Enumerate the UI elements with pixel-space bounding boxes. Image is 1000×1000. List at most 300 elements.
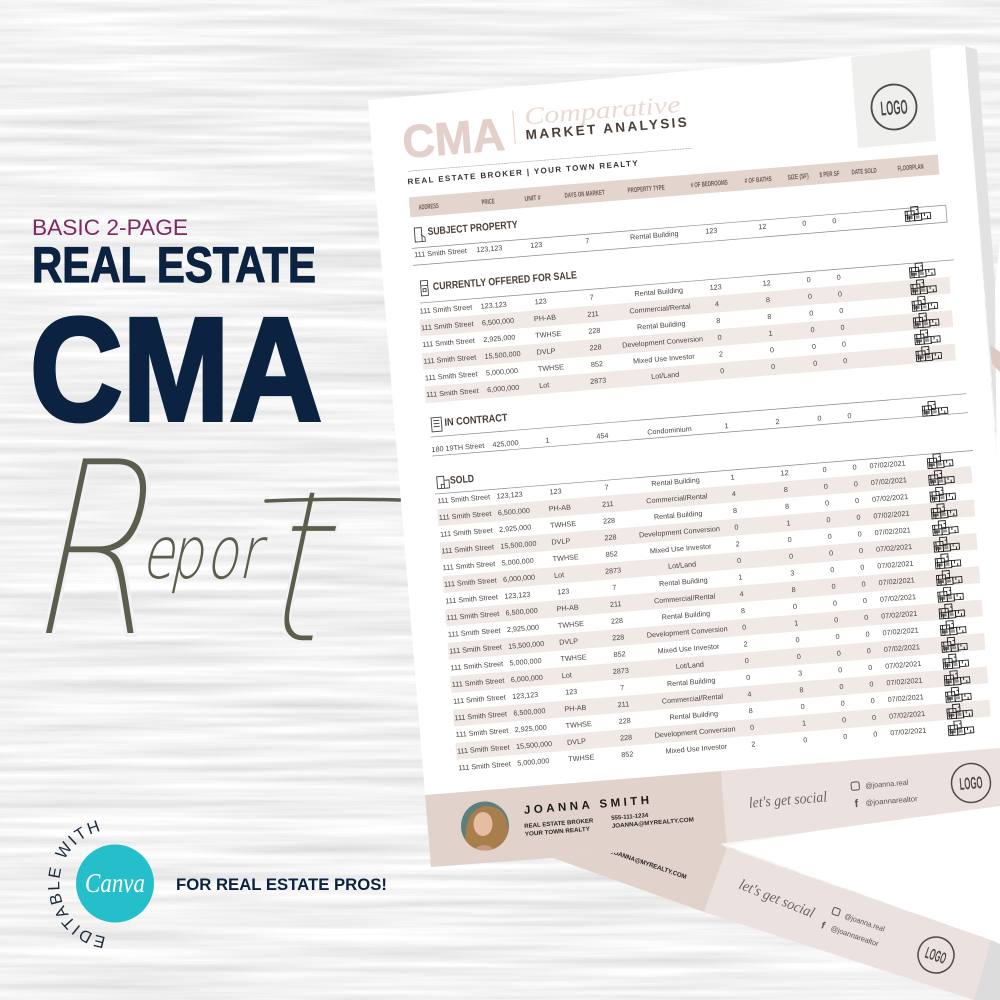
sold rows: 0 — [872, 713, 876, 722]
sold rows: 111 Smith Street — [453, 692, 506, 706]
subject row: 111 Smith Street — [414, 246, 467, 259]
sold rows: 123 — [549, 486, 562, 496]
sold rows: 111 Smith Street — [440, 526, 493, 539]
sold rows: 852 — [621, 749, 634, 759]
left heading block — [10, 215, 400, 694]
subject row: 0 — [832, 216, 837, 225]
heading: CMA: CMA — [30, 288, 322, 452]
sold rows: 0 — [861, 579, 866, 589]
offered rows: 0 — [717, 333, 722, 342]
offered row strips — [419, 277, 956, 403]
sold rows: Development Conversion — [639, 524, 720, 540]
sold rows: TWHSE — [565, 719, 592, 730]
sold rows: 211 — [602, 499, 614, 509]
page shadow strips — [965, 46, 1000, 480]
offered rows: 12 — [762, 278, 771, 288]
sold rows: DVLP — [567, 736, 586, 747]
social handles: @joanna.real — [865, 778, 909, 790]
sold rows: 0 — [827, 532, 832, 541]
sold rows: 0 — [835, 632, 840, 641]
sold rows: Rental Building — [667, 676, 716, 688]
title: market analysis: MARKET ANALYSIS — [525, 115, 687, 143]
sold rows: 07/02/2021 — [869, 459, 906, 470]
sold rows: 0 — [789, 552, 793, 561]
agent name: JOANNA SMITH — [524, 795, 650, 817]
sold rows: 0 — [750, 723, 754, 732]
subject row: Rental Building — [630, 229, 679, 242]
sold rows: DVLP — [551, 536, 571, 547]
sold rows: 0 — [863, 596, 867, 605]
sold rows: 0 — [839, 682, 844, 691]
offered rows: 7 — [589, 293, 594, 302]
offered rows: 0 — [840, 323, 845, 332]
sold rows: DVLP — [559, 636, 579, 647]
page 2 handles: f — [820, 920, 827, 932]
sold rows: 0 — [873, 730, 878, 739]
sold rows: Commercial/Rental — [646, 491, 708, 505]
offered rows: 0 — [720, 366, 725, 375]
sold rows: 1 — [794, 618, 799, 628]
sold rows: 07/02/2021 — [877, 559, 914, 571]
offered rows: Commercial/Rental — [629, 302, 691, 315]
offered rows: 111 Smith Street — [421, 319, 474, 332]
table header band: SIZE (SF) — [787, 173, 809, 182]
sold rows: 0 — [830, 565, 835, 574]
page 2 handles: @joannarealtor — [830, 924, 880, 949]
page 2 white sheet — [727, 240, 1000, 960]
table header band — [409, 154, 939, 217]
page 2 social script: let's get social — [737, 877, 817, 922]
sold rows: 228 — [612, 632, 625, 642]
footer text in sheared coordinates — [523, 773, 919, 838]
sold rows: Rental Building — [661, 609, 710, 622]
sold rows: 111 Smith Street — [438, 509, 492, 522]
section: currently offered for sale — [416, 238, 962, 403]
sold rows: 228 — [620, 733, 632, 743]
offered rows: 211 — [587, 309, 599, 319]
sold rows: 07/02/2021 — [885, 659, 921, 671]
sold rows: 6,000,000 — [503, 572, 535, 584]
offered rows: 6,500,000 — [482, 316, 514, 327]
offered rows: 8 — [716, 316, 721, 325]
dotted rule — [408, 148, 692, 171]
sold rows: 0 — [842, 715, 846, 725]
offered rows: 123,123 — [480, 300, 507, 311]
table header band: # OF BEDROOMS — [690, 180, 728, 190]
sold rows: 1 — [802, 718, 806, 728]
agent role — [524, 818, 595, 838]
offered rows: 2,925,000 — [483, 333, 516, 344]
offered rows: 1 — [768, 329, 773, 338]
sold rows: 0 — [866, 646, 871, 655]
table header band: ADDRESS — [418, 203, 439, 212]
page 2 logo — [913, 932, 959, 978]
sold rows: 07/02/2021 — [883, 642, 920, 654]
sold rows: TWHSE — [560, 652, 587, 663]
contract row: 1 — [545, 436, 550, 445]
sold rows: 111 Smith Street — [451, 676, 505, 689]
sold rows: 07/02/2021 — [881, 609, 918, 621]
sold rows: 07/02/2021 — [872, 492, 908, 504]
sold rows: Rental Building — [659, 575, 708, 588]
sold rows: 2 — [743, 639, 748, 649]
contract row — [431, 400, 948, 456]
social handles: @joannarealtor — [865, 794, 918, 807]
sold rows: 0 — [823, 482, 828, 491]
offered rows: 2 — [719, 349, 723, 359]
script word: Report: R — [10, 409, 193, 694]
heading: in contract: IN CONTRACT — [444, 412, 508, 429]
sold rows: 0 — [826, 515, 831, 524]
sold rows: 8 — [799, 685, 804, 694]
sold rows: 0 — [857, 529, 862, 539]
sold rows: Rental Building — [669, 709, 718, 722]
page 1 content in sheared local coordinates — [400, 71, 995, 776]
page 2 logo: LOGO — [923, 945, 948, 968]
sold rows: 123,123 — [504, 590, 531, 601]
script word: Report: p — [165, 511, 217, 596]
agent role: REAL ESTATE BROKER — [524, 818, 594, 830]
sold rows: 0 — [746, 673, 750, 682]
sold rows: 15,500,000 — [500, 539, 537, 551]
offered rows: 111 Smith Street — [423, 353, 476, 366]
sold rows: 111 Smith Street — [445, 592, 498, 606]
table header band: # OF BATHS — [744, 176, 772, 185]
sold rows: 123 — [565, 687, 577, 697]
sold rows: 2 — [735, 539, 740, 548]
logo badge: LOGO — [880, 96, 908, 121]
page 2 light footer — [704, 848, 991, 1000]
table header band: FLOORPLAN — [897, 164, 924, 173]
table header band: DATE SOLD — [851, 168, 877, 177]
sold rows: 228 — [618, 716, 631, 726]
sold rows: 111 Smith Street — [444, 576, 497, 589]
offered rows: Lot — [539, 380, 550, 390]
sold rows: Lot — [561, 670, 572, 680]
sold rows: 0 — [840, 699, 845, 708]
script word: Report: o — [201, 511, 251, 596]
offered rows: 0 — [842, 339, 846, 349]
portrait photo — [461, 802, 509, 850]
sold rows: 852 — [613, 649, 626, 659]
offered rows: 0 — [843, 356, 848, 365]
title: CMA: CMA — [400, 108, 506, 168]
sold rows: 07/02/2021 — [876, 542, 912, 554]
sold rows: 15,500,000 — [516, 739, 552, 751]
sold rows: 123,123 — [496, 490, 523, 501]
sold rows: 2873 — [605, 566, 621, 576]
sold rows: Development Conversion — [654, 724, 736, 740]
script word: Report: e — [137, 511, 188, 596]
offered rows: Rental Building — [634, 285, 683, 298]
sold rows: PH-AB — [564, 703, 587, 714]
sold rows: 228 — [604, 532, 617, 542]
sold rows: 0 — [864, 613, 869, 622]
sold rows: 3 — [790, 568, 795, 578]
offered rows — [419, 262, 942, 401]
sold rows: 1 — [786, 518, 791, 528]
sold rows: Commercial/Rental — [654, 591, 716, 605]
offered rows: 0 — [838, 289, 842, 299]
sold rows: 7 — [612, 583, 617, 592]
sold rows: 7 — [604, 483, 609, 492]
sold rows: 111 Smith Street — [449, 642, 502, 656]
sold rows: 0 — [742, 623, 747, 632]
sold rows: 852 — [605, 549, 618, 559]
subject row: 7 — [585, 236, 590, 245]
contract row: 0 — [817, 414, 822, 423]
offered rows: 0 — [836, 273, 841, 282]
agent contact: 555-111-1234 — [611, 813, 649, 822]
icon: contract — [431, 417, 442, 432]
page 2 contact: JOANNA@MYREALTY.COM — [609, 848, 687, 881]
sold rows: 07/02/2021 — [878, 575, 915, 587]
sold rows: 2873 — [612, 666, 629, 676]
offered rows: 5,000,000 — [486, 366, 518, 378]
sold rows: 111 Smith Street — [437, 492, 490, 505]
sold rows: 07/02/2021 — [880, 592, 916, 604]
sold rows: 8 — [785, 502, 789, 511]
sold rows: Rental Building — [651, 475, 700, 488]
sold rows: 0 — [859, 546, 863, 555]
sold rows: 0 — [853, 479, 858, 489]
offered rows: PH-AB — [534, 312, 557, 323]
sold rows: Mixed Use Investor — [657, 642, 720, 656]
sold rows: 0 — [856, 513, 861, 522]
page 2 behind — [553, 46, 1000, 1000]
offered rows: 228 — [589, 342, 602, 352]
sold rows: 0 — [787, 535, 792, 544]
sold rows: 4 — [739, 589, 744, 598]
sold rows: 8 — [748, 706, 753, 715]
heading: subject property: SUBJECT PROPERTY — [427, 219, 518, 238]
offered rows: 111 Smith Street — [425, 369, 478, 382]
sold rows: 5,000,000 — [509, 656, 542, 668]
social handles: f — [854, 798, 859, 810]
sold rows: 6,000,000 — [510, 673, 543, 684]
sold rows: 5,000,000 — [501, 556, 534, 567]
sold rows: 07/02/2021 — [870, 475, 907, 487]
page 1 footer — [425, 748, 1000, 867]
sold rows: 0 — [860, 563, 865, 572]
page 2 handles: @joanna.real — [843, 911, 886, 934]
sold rows: 0 — [744, 656, 749, 665]
offered rows: 0 — [771, 362, 776, 371]
sold rows: 07/02/2021 — [890, 726, 927, 737]
sold rows: 0 — [825, 498, 829, 508]
sold rows: 0 — [868, 663, 872, 672]
table header band: DAYS ON MARKET — [564, 190, 605, 200]
sold rows: 0 — [796, 652, 801, 661]
sold rows: 07/02/2021 — [882, 625, 919, 637]
offered rows: 15,500,000 — [484, 349, 521, 361]
sold rows: Development Conversion — [646, 624, 728, 640]
offered rows: 111 Smith Street — [419, 302, 473, 316]
agent role: YOUR TOWN REALTY — [525, 827, 590, 838]
sold rows: 123,123 — [512, 690, 539, 701]
sold rows: 0 — [795, 635, 800, 644]
sold rows: 0 — [838, 665, 842, 675]
sold rows: 111 Smith Street — [457, 742, 510, 756]
contract row: 1 — [724, 421, 729, 430]
offered rows: 0 — [809, 308, 814, 318]
sold rows: TWHSE — [552, 552, 579, 563]
sold rows: 07/02/2021 — [873, 509, 910, 521]
sold rows: 07/02/2021 — [887, 692, 924, 704]
sold rows: 0 — [852, 463, 857, 472]
contract row: Condominium — [647, 424, 692, 437]
sold rows: 0 — [843, 732, 848, 741]
sold rows: Mixed Use Investor — [665, 742, 728, 756]
offered rows: Rental Building — [637, 319, 686, 332]
offered rows: 852 — [591, 359, 603, 369]
icon: offered building — [420, 280, 429, 296]
offered rows: TWHSE — [538, 362, 564, 373]
sold rows: 07/02/2021 — [874, 525, 911, 537]
title divider — [513, 110, 515, 144]
sold rows: 6,500,000 — [505, 606, 538, 617]
sold rows: 4 — [731, 489, 736, 498]
sold rows: 07/02/2021 — [889, 709, 925, 721]
sold rows: 12 — [780, 468, 789, 478]
script word: Report: r — [234, 511, 274, 596]
sold rows: 228 — [611, 616, 623, 626]
sold rows: PH-AB — [548, 502, 571, 513]
sold rows: 6,500,000 — [513, 706, 546, 718]
sold row strips — [437, 466, 991, 760]
sold rows: 111 Smith Street — [441, 542, 494, 556]
offered rows: DVLP — [536, 346, 556, 357]
offered rows: 0 — [812, 342, 816, 351]
sold rows: 2 — [751, 739, 756, 749]
table header band: $ PER SF — [819, 170, 840, 179]
sold rows: 07/02/2021 — [886, 676, 923, 687]
offered rows: Lot/Land — [651, 370, 680, 381]
heading: basic 2-page: BASIC 2-PAGE — [32, 215, 188, 240]
offered rows: Mixed Use Investor — [633, 352, 696, 366]
logo box — [851, 49, 936, 148]
sold rows: 0 — [793, 602, 797, 611]
sold rows: 1 — [730, 472, 735, 482]
sold rows: TWHSE — [558, 619, 584, 630]
offered rows: 4 — [715, 299, 719, 309]
sold rows: 0 — [834, 615, 839, 624]
sold rows: 111 Smith Street — [446, 609, 500, 622]
offered rows: TWHSE — [535, 329, 562, 340]
sold rows: 0 — [734, 522, 739, 532]
offered rows: 2873 — [590, 376, 607, 386]
sold rows: 8 — [791, 585, 796, 594]
sold rows: 2,925,000 — [507, 623, 539, 634]
title script: comparative: Comparative — [523, 92, 682, 131]
sold rows: 8 — [733, 506, 737, 515]
sold rows: 3 — [798, 668, 802, 678]
social handles — [851, 777, 919, 810]
section: in contract — [429, 375, 968, 456]
offered rows: 8 — [766, 295, 770, 304]
sold rows: 211 — [610, 599, 622, 609]
contract row: 0 — [847, 411, 852, 420]
sold rows: 111 Smith Street — [442, 559, 496, 572]
offered rows: 111 Smith Street — [422, 336, 475, 349]
heading: sold: SOLD — [450, 473, 475, 487]
sold rows: 15,500,000 — [508, 639, 545, 651]
sold rows: 1 — [738, 572, 743, 582]
sold rows: 8 — [741, 606, 745, 615]
contract row: 2 — [775, 417, 780, 426]
subject row — [414, 205, 931, 261]
offered rows: 0 — [839, 306, 844, 315]
subject row: 12 — [758, 222, 767, 231]
sold rows: 0 — [822, 465, 827, 474]
script word: Report: t — [248, 443, 362, 693]
table header band: PRICE — [481, 198, 495, 206]
sold rows: 0 — [869, 680, 874, 689]
offered rows: 123 — [709, 282, 722, 292]
icon: sold buildings — [437, 476, 450, 489]
sold rows: TWHSE — [550, 519, 577, 530]
footer logo — [950, 762, 992, 804]
subject row: 123 — [705, 226, 718, 236]
sold rows: 0 — [833, 598, 837, 608]
table header band: UNIT # — [524, 195, 541, 203]
sold rows: Commercial/Rental — [661, 692, 724, 706]
contract row: 454 — [596, 431, 609, 441]
sold rows: 111 Smith Street — [454, 709, 507, 722]
sold rows: Mixed Use Investor — [650, 541, 712, 555]
sold rows: 111 Smith Street — [450, 659, 503, 672]
curved label: editable with: EDITABLE WITH — [48, 820, 105, 948]
offered rows: 0 — [810, 325, 815, 334]
subject row: 0 — [802, 219, 807, 228]
icon: subject property — [414, 227, 425, 242]
offered rows: 6,000,000 — [487, 383, 520, 394]
teal circle with canva wordmark: Canva — [85, 868, 145, 898]
sold rows: 0 — [855, 496, 859, 505]
offered rows: 0 — [770, 345, 774, 355]
contract row: 180 19TH Street — [431, 441, 485, 454]
sold rows: 0 — [865, 629, 870, 639]
sold rows: 211 — [617, 699, 630, 709]
offered rows: 0 — [808, 292, 812, 301]
table header band: PROPERTY TYPE — [627, 185, 665, 195]
sold rows: Lot/Land — [668, 559, 696, 571]
sold rows: 228 — [603, 516, 615, 526]
canva badge — [48, 820, 154, 948]
footer dark panel — [425, 771, 727, 867]
sold rows — [437, 453, 974, 775]
sold rows: 111 Smith Street — [458, 759, 511, 772]
agent contact: JOANNA@MYREALTY.COM — [612, 817, 694, 830]
offered rows: 123 — [534, 296, 547, 306]
sold rows: 7 — [620, 683, 624, 692]
sold rows: TWHSE — [568, 752, 595, 764]
offered rows: 8 — [767, 312, 772, 321]
agent contact — [611, 809, 694, 830]
heading: real estate: REAL ESTATE — [32, 237, 316, 293]
page 2 pink sliver — [990, 345, 1000, 372]
contract row: 425,000 — [492, 438, 519, 449]
sold rows: 4 — [747, 689, 752, 699]
page 1 sheet — [368, 46, 1000, 867]
footer light panel — [721, 748, 1000, 843]
sold rows: 0 — [836, 649, 841, 658]
tagline: FOR REAL ESTATE PROS! — [176, 876, 387, 894]
sold rows: 111 Smith Street — [448, 626, 501, 639]
script word: Report — [10, 409, 400, 694]
subject row: 123,123 — [476, 243, 503, 254]
sold rows: 0 — [737, 556, 741, 565]
